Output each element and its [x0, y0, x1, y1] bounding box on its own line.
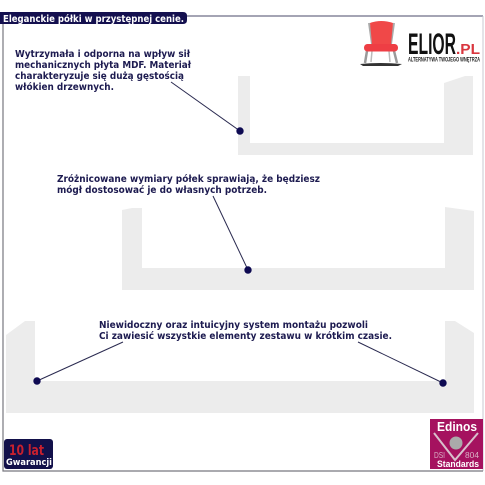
logo suffix: .PL [456, 41, 480, 58]
callout arrow: mounting left [33, 342, 123, 385]
badge: 10-year warranty [4, 439, 53, 469]
callout arrow: mounting right [358, 342, 447, 387]
text block: material: Wytrzymała i odporna na wpływ sił [15, 49, 190, 60]
logo: Elior.pl [360, 21, 480, 66]
badge: Edinos standards: 804 [465, 451, 480, 460]
text block: mounting [99, 320, 392, 342]
text block: mounting: Ci zawiesić wszystkie elementy zestawu w krótkim czasie. [99, 331, 392, 342]
text block: material: charakteryzuje się dużą gęstością [15, 71, 184, 82]
text block: material: włókien drzewnych. [15, 82, 114, 93]
badge: Edinos standards [430, 419, 483, 469]
shelf: bottom [6, 321, 474, 413]
text block: mounting: Niewidoczny oraz intuicyjny system montażu pozwoli [99, 320, 368, 331]
icon: red chair [360, 21, 402, 66]
badge: Edinos standards: Standards [437, 459, 479, 469]
callout arrow: material [171, 82, 244, 135]
badge: Edinos standards: Edinos [437, 419, 477, 434]
text block: material [15, 49, 191, 93]
text block: dimensions [57, 174, 320, 196]
callout arrow: dimensions [213, 196, 252, 274]
shelf: middle [122, 207, 474, 290]
badge: Edinos standards: DSI [434, 451, 445, 460]
text block: material: mechanicznych płyta MDF. Materiał [15, 60, 191, 71]
badge: 10-year warranty: 10 lat [9, 443, 44, 459]
heading bar: Eleganckie półki w przystępnej cenie. [3, 13, 184, 25]
text block: dimensions: Zróżnicowane wymiary półek sprawiają, że będziesz [57, 174, 320, 185]
badge: 10-year warranty: Gwarancji [6, 458, 52, 468]
shelf: top [238, 76, 473, 155]
text block: dimensions: mógł dostosować je do własnych potrzeb. [57, 185, 267, 196]
